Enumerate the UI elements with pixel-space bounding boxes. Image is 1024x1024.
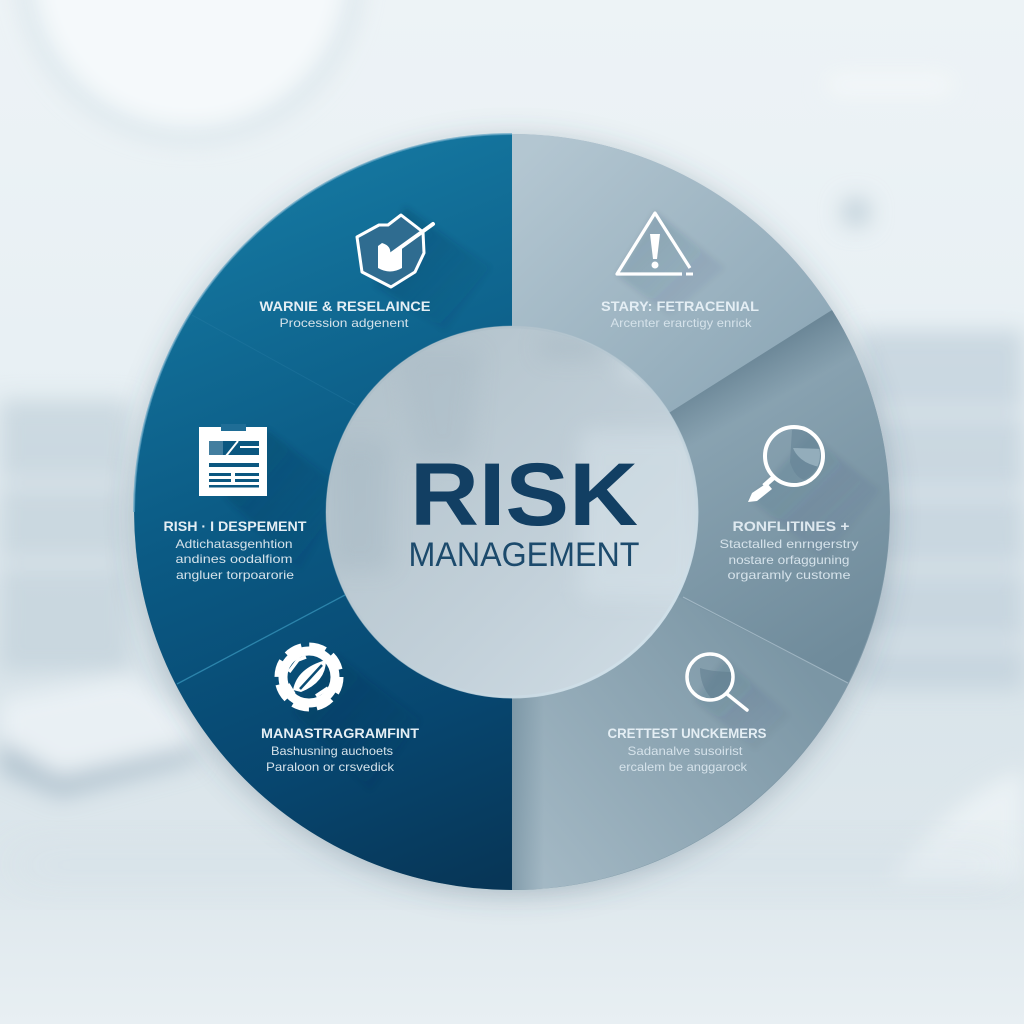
description: Sadanalve susoirist <box>628 744 743 758</box>
panel: frontlines <box>720 427 858 582</box>
description: Bashusning auchoets <box>271 744 393 758</box>
description: andines oodalfiom <box>176 552 292 566</box>
icon: warning triangle <box>617 213 693 274</box>
subtitle: MANAGEMENT: MANAGEMENT <box>408 536 640 574</box>
description: Procession adgenent <box>280 316 409 330</box>
segment: middle right <box>512 310 890 683</box>
description: Stactalled enrngerstry <box>720 537 858 551</box>
divider: vertical shading bottom <box>512 695 544 890</box>
description: angluer torpoarorie <box>176 568 294 582</box>
description: Arcenter erarctigy enrick <box>610 316 753 330</box>
description: orgaramly custome <box>728 568 851 582</box>
description <box>720 537 858 582</box>
panel: customers <box>608 654 766 774</box>
label: RONFLITINES + <box>732 518 850 534</box>
label: WARNIE & RESELAINCE <box>260 298 430 314</box>
description <box>266 744 395 774</box>
description: ercalem be anggarock <box>619 760 748 774</box>
center hub <box>326 326 700 698</box>
description <box>619 744 748 774</box>
description: Paraloon or crsvedick <box>266 760 395 774</box>
label: RISH · I DESPEMENT <box>164 518 307 534</box>
description <box>176 537 294 582</box>
description: nostare orfagguning <box>728 553 850 567</box>
outer rim highlight <box>134 134 512 512</box>
segment: upper right <box>512 134 832 512</box>
label: STARY: FETRACENIAL <box>601 298 759 314</box>
segment: lower right <box>512 512 848 890</box>
icon: document <box>199 424 267 496</box>
icon: magnifier with pie <box>748 427 830 502</box>
icon: gear <box>279 647 339 707</box>
ring chart <box>134 134 890 890</box>
title: RISK: RISK <box>410 444 638 544</box>
description: Adtichatasgenhtion <box>176 537 292 551</box>
label: CRETTEST UNCKEMERS <box>608 725 766 741</box>
divider shading: upper right <box>670 310 850 436</box>
divider: lower right <box>683 597 848 683</box>
divider: upper left <box>192 315 355 405</box>
panel: strategy <box>601 213 759 330</box>
panel: warning and resilience <box>260 215 433 330</box>
panel: management <box>261 647 419 774</box>
icon: magnifier <box>687 654 747 710</box>
label: MANASTRAGRAMFINT <box>261 725 419 741</box>
icon shadows <box>228 208 859 730</box>
icon: shield check <box>357 215 433 287</box>
hub rim <box>327 327 697 697</box>
panel: risk assessment <box>164 424 307 582</box>
segment: left half blue <box>134 134 512 890</box>
divider: lower left <box>177 595 345 684</box>
